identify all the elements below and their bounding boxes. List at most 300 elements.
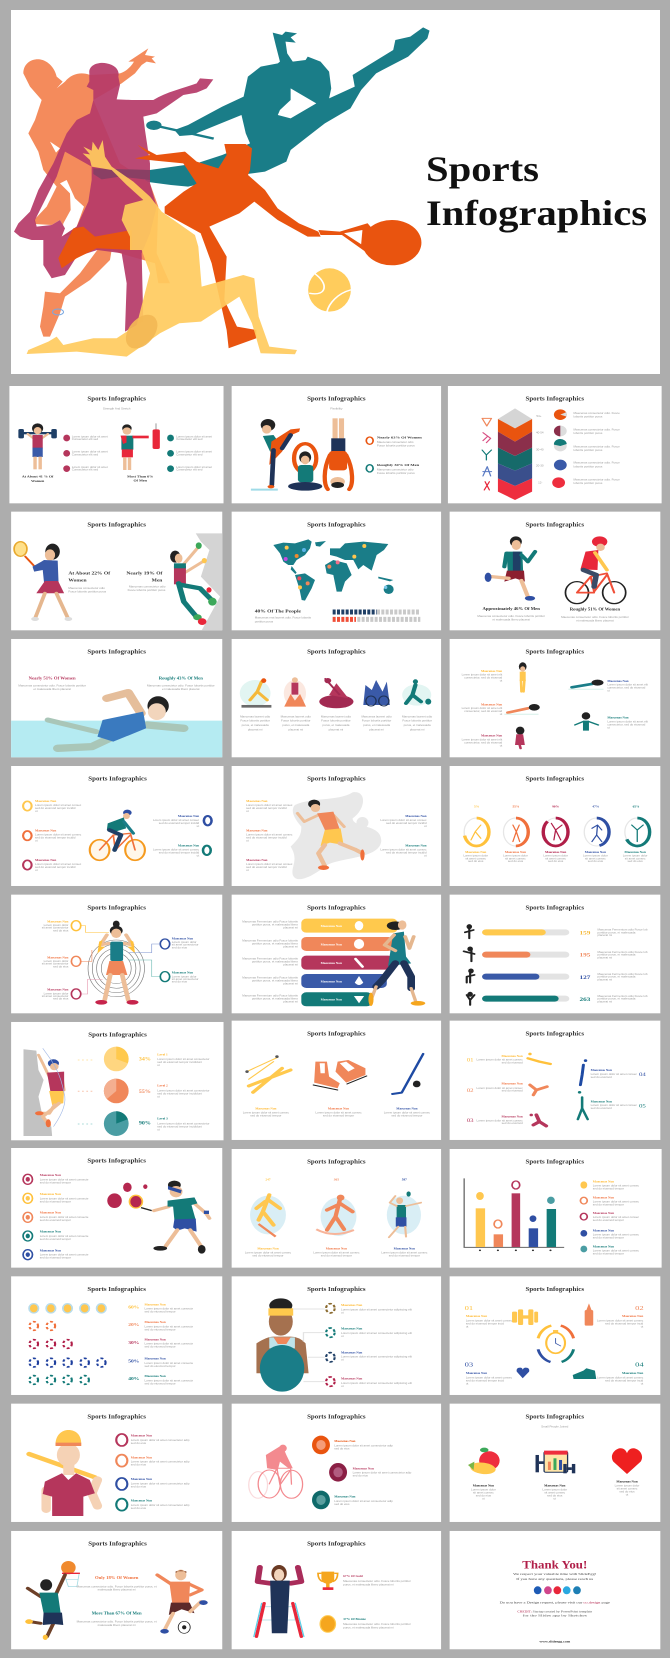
text: men stat [77, 1611, 157, 1627]
connectors [81, 926, 159, 994]
dotted leaders [78, 1060, 95, 1124]
text: ring captions: Lorem ipsum dolor [583, 854, 608, 858]
text: list blocks: Maecenas Non [144, 1303, 166, 1306]
slide title: Sports Infographics [307, 1158, 366, 1165]
text: list blocks: Lorem ipsum dolor sit amet consecte [40, 1178, 89, 1181]
panel: slide 14 stacked ribbons with jogger [232, 895, 441, 1013]
text: three captions: Lorem ipsum dolor sit amet consec [243, 1111, 290, 1115]
slide title: Sports Infographics [88, 1540, 147, 1547]
text: blocks: Maecenas Non [466, 1314, 487, 1318]
numbers: 02 [467, 1088, 474, 1094]
stat: women: Maecenas consectetur odio. Fusce lobortis porttitor [18, 684, 86, 687]
icons: bar tops [476, 1181, 555, 1228]
text: list blocks: Lorem ipsum dolor sit amet consectetur adip [334, 1444, 393, 1447]
text: right blocks: sed do eiusmod tempor incidid [159, 851, 200, 855]
text: legend blocks: Maecenas Non [593, 1196, 614, 1199]
panel: slide 18 numbered sports [450, 1021, 660, 1140]
text: right blocks: ut [197, 824, 199, 828]
text: left blocks: sit amet consectetur [42, 962, 68, 966]
text: right blocks: Maecenas Non [607, 679, 629, 683]
slide title: Sports Infographics [525, 775, 584, 782]
text: gold stat: 67% Of Gold [343, 1574, 363, 1578]
text: captions: Maecenas Non [326, 1247, 347, 1250]
labels: ring percentages: 5% [474, 805, 479, 809]
text: list blocks [144, 1303, 194, 1385]
text: left blocks [462, 669, 503, 747]
text: left blocks: Maecenas Non [481, 703, 503, 706]
text: levels: ut [157, 1063, 160, 1067]
panel: slide 23 athlete with ball [232, 1276, 441, 1395]
text: left blocks: consectetur, sed do eiusmod [464, 709, 503, 713]
text: website: www.slideegg.com [539, 1640, 570, 1643]
text: five captions: purus, et malesuada [322, 723, 350, 727]
text: right blocks: sed do eiusmod [591, 1106, 612, 1110]
title [426, 149, 647, 233]
text: bar descriptions: porttitor purus, et malesuada [598, 975, 636, 979]
text: right blocks: consectetur, sed do eiusmod [607, 686, 646, 690]
text: list blocks: sed do eius [353, 1474, 369, 1478]
text: left blocks: ut [500, 679, 502, 683]
stat: men: Men [152, 579, 163, 583]
numbers: 01 [465, 1304, 473, 1312]
text: percentages [139, 1057, 151, 1126]
slide title: Sports Infographics [525, 395, 584, 402]
text: list blocks: Lorem ipsum dolor sit amet consectetur adipiscing elit [341, 1355, 412, 1359]
icons: three discs [312, 1436, 347, 1509]
panel: slide 17 winter equipment [232, 1021, 441, 1140]
text: left blocks: Lorem ipsum dolor sit amet consec [35, 833, 82, 837]
text: left blocks: sed do eiusmod [502, 1121, 523, 1125]
text: left blocks: ut [246, 868, 249, 872]
text: three captions: sed do eiusmod tempor [250, 1114, 282, 1118]
text: ring captions: sit amet consec [585, 857, 606, 860]
text: left blocks: Lorem ipsum dolor sit amet consec [246, 833, 293, 837]
text: levels: ut [157, 1128, 160, 1131]
panel: slide 6 runner and cyclist [450, 512, 660, 630]
text: list blocks: Lorem ipsum dolor sit amet consectetur adipiscing elit [341, 1381, 412, 1385]
stat: men [147, 676, 215, 691]
text: right blocks: sit amet consectetur [172, 977, 199, 981]
panel: slide 25 baseball player [11, 1404, 222, 1522]
stat: men [366, 463, 420, 475]
text: list blocks: Lorem ipsum dolor sit amet consecte [144, 1325, 194, 1328]
text: left blocks: sit amet consectetur [42, 994, 68, 998]
text: left descriptions [242, 920, 299, 1004]
text: list blocks: Maecenas Non [341, 1303, 363, 1307]
text: three captions: sed do eiusmod tempor [391, 1114, 423, 1118]
panel: slide 21 bar chart [450, 1149, 662, 1268]
text: left blocks: sed do eiusmod tempor incidid [35, 836, 76, 840]
text: ring captions: sit amet consec [545, 857, 567, 860]
text: five captions: Fusce lobortis porttitor [362, 719, 391, 723]
text: five captions: Maecenas laoreet odio [281, 715, 311, 718]
chart: three pies [104, 1047, 129, 1136]
text: ring captions: Maecenas Non [465, 850, 487, 854]
text: bronze stat: 37% Of Bronze [343, 1617, 367, 1621]
stat label men: Most Than 6% [127, 475, 154, 479]
slide title: Sports Infographics [87, 1285, 146, 1293]
text: pie descriptions: Maecenas consectetur odio. Fusce [574, 461, 620, 465]
stat: women [366, 435, 423, 448]
text: left blocks: Maecenas Non [246, 799, 268, 803]
panel: slide 9 exercise poses [450, 639, 660, 757]
illustration: athlete holding teal ball [256, 1298, 309, 1392]
text: percentages: 40% [128, 1377, 139, 1382]
text: pie descriptions: lobortis porttitor purus [574, 481, 603, 485]
labels: age ranges [536, 414, 544, 485]
text: captions: Maecenas Non [473, 1484, 494, 1487]
text: left blocks: Lorem ipsum dolor sit amet elit [462, 673, 502, 677]
text: list blocks: ut [341, 1311, 344, 1314]
text: left blocks: Lorem ipsum dolor sit amet consec [35, 862, 82, 866]
numbers: 02 [635, 1304, 644, 1312]
text: list blocks [40, 1173, 89, 1260]
text: three captions: Maecenas Non [328, 1107, 349, 1111]
text: right blocks [591, 1068, 638, 1110]
illustration: teal woman [575, 712, 598, 731]
stat: men: Fusce lobortis porttitor purus [128, 588, 166, 592]
text: left descriptions: Maecenas Fermentum odio Fusce lobortis [242, 976, 299, 979]
icons: ball rings [326, 1304, 335, 1386]
text: captions: sed do eius [547, 1494, 563, 1497]
text: ring captions: sed do eius [468, 859, 484, 863]
text: pie descriptions: lobortis porttitor purus [574, 448, 603, 452]
text: bar descriptions: placerat mi [598, 978, 613, 981]
text: blocks: sed do eiusmod tempor incid [605, 1322, 644, 1326]
text: pie descriptions: Maecenas consectetur odio. Fusce [574, 428, 620, 431]
list: crimson bullets: Consectetur elit sed [72, 468, 99, 472]
stat: women: Maecenas consectetur odio [377, 440, 414, 444]
text: right blocks: Maecenas Non [591, 1100, 612, 1104]
stat: men: Maecenas consectetur odio [129, 585, 166, 588]
panel: slide 12 five progress rings [450, 766, 660, 886]
text: ring captions: Lorem ipsum dolor [503, 854, 528, 858]
text: list blocks: Lorem ipsum dolor sit amet consecte [144, 1361, 194, 1365]
text: legend blocks: Maecenas Non [593, 1211, 614, 1215]
chart: progress rings [464, 818, 650, 846]
text: bar descriptions: Maecenas Fermentum odio Fusce lob [598, 950, 648, 954]
text: right blocks: Maecenas Non [405, 814, 427, 818]
icon: trophy [318, 1572, 338, 1590]
text: blocks: Maecenas Non [466, 1371, 487, 1375]
stat: women: Nearly 63% Of Women [377, 435, 423, 440]
stat: women: At About 22% Of [68, 572, 110, 576]
text: three captions: Lorem ipsum dolor sit amet consec [315, 1111, 362, 1115]
title: Infographics [426, 193, 647, 233]
text: blocks: Maecenas Non [622, 1371, 644, 1375]
text: list blocks: ut [341, 1334, 344, 1338]
text: ring captions: sed do eius [627, 859, 643, 863]
text: pie descriptions: Maecenas consectetur odio. Fusce [574, 411, 620, 415]
panel: slide 27 food and training [450, 1404, 660, 1522]
text: runner stat [477, 606, 545, 621]
text: blocks: ut [466, 1325, 469, 1328]
slide title: Sports Infographics [307, 775, 366, 782]
text: ring captions: Lorem ipsum dolor [623, 854, 648, 858]
text: left blocks: Lorem ipsum dolor sit amet consec [246, 862, 293, 866]
list: teal bullets: Lorem ipsum dolor sit amet [176, 465, 212, 469]
panel: slide 11 runner over blob [232, 766, 441, 886]
stat: men: Maecenas consectetur odio. Fusce lobortis porttitor [147, 684, 215, 687]
illustration: volleyball player [387, 1191, 421, 1237]
text: percentages: 50% [128, 1360, 139, 1364]
text: left blocks: Lorem ipsum dolor sit amet elit [462, 706, 502, 710]
text: right blocks: Maecenas Non [607, 716, 629, 720]
text: three captions [243, 1107, 431, 1118]
slide title: Sports Infographics [307, 395, 366, 402]
illustration: fitness woman [95, 921, 138, 1005]
text: left blocks: Maecenas Non [501, 1115, 523, 1118]
small selection ring [52, 309, 64, 315]
icons: social row [534, 1586, 581, 1594]
text: left descriptions: placerat mi [283, 1000, 298, 1004]
text: left blocks: Maecenas Non [481, 669, 503, 673]
text: captions: Maecenas Non [616, 1480, 638, 1483]
text: left blocks: sed do eiusmod [502, 1061, 523, 1064]
text: left blocks: sed do eiusmod tempor incidid [35, 806, 76, 810]
text: bronze stat: Maecenas consectetur odio. Fusce lobortis porttitor [343, 1622, 411, 1626]
slide title: Sports Infographics [307, 903, 366, 911]
text: left blocks: Lorem ipsum dolor sit amet elit [462, 738, 502, 741]
text: levels: Lorem ipsum dolor sit amet consectetur [157, 1089, 210, 1092]
numbers: 127 [580, 975, 591, 981]
text: left blocks [35, 799, 82, 872]
text: right blocks: Lorem ipsum dolor sit amet consec [591, 1103, 638, 1107]
text: right blocks: Maecenas Non [178, 844, 200, 848]
text: captions: sed do eiusmod tempor [389, 1254, 420, 1258]
text: captions: sit amet consec [617, 1487, 638, 1490]
text: list blocks: Lorem ipsum dolor sit amet consectetur adip [131, 1503, 190, 1507]
text: right blocks: Lorem ipsum dolor sit amet consec [380, 848, 427, 852]
text: five captions: placerat mi [329, 728, 344, 732]
panel: slide 20 board sports [232, 1149, 441, 1268]
text: women stat: malesuada libero placerat mi [98, 1588, 136, 1591]
text: left descriptions: Maecenas Fermentum odio Fusce lobortis [242, 920, 299, 924]
text: five captions: placerat mi [369, 728, 384, 732]
pictogram: teal row [29, 1376, 89, 1384]
text: levels [157, 1053, 210, 1131]
text: three captions: Maecenas Non [255, 1107, 277, 1111]
panel: slide 28 basketball and soccer [11, 1531, 222, 1649]
illustration: cyclist [565, 536, 626, 604]
illustration: tennis woman [14, 542, 72, 621]
title: Sports [426, 149, 539, 189]
background blob [291, 792, 381, 879]
text: legend blocks: Maecenas Non [593, 1245, 614, 1248]
stat: women: Nearly 51% Of Women [29, 676, 76, 680]
text: list blocks: sed do eiusmod tempor [144, 1364, 176, 1368]
text: left blocks: Lorem ipsum dolor sit amet consec [476, 1058, 523, 1062]
panel: slide 2 flexibility [232, 386, 441, 503]
icon: coin [320, 1616, 336, 1632]
text: women stat: Only 18% Of Women [95, 1575, 139, 1580]
text: left blocks: Lorem ipsum dolor sit amet consec [35, 803, 82, 807]
text: runner stat: et malesuada libero placerat [492, 618, 530, 621]
text: three captions: Maecenas Non [396, 1107, 418, 1111]
text: left blocks: ut [35, 868, 38, 872]
text: left blocks: Maecenas Non [47, 920, 69, 923]
text: cyclist stat: Roughly 51% Of Women [570, 607, 621, 612]
text: left blocks [42, 920, 69, 1001]
text: five captions: purus, et malesuada [404, 723, 431, 727]
text: left blocks: sed do eiusmod tempor incidid [35, 865, 76, 869]
text: legend blocks [593, 1180, 640, 1255]
illustration: yellow stretching figure silhouette [27, 140, 297, 357]
text: blocks: sed do eiusmod tempor incid [466, 1379, 505, 1383]
text: list blocks: Maecenas Non [40, 1230, 61, 1234]
text: left blocks: Lorem ipsum dolor sit amet consec [476, 1086, 523, 1090]
illustration: weightlifter woman [18, 423, 57, 469]
text: left blocks: Lorem ipsum dolor sit amet consec [246, 803, 293, 807]
charts: five small pies [552, 409, 567, 488]
text: bar descriptions: porttitor purus, et malesuada [598, 931, 636, 934]
text: percentages: 20% [128, 1323, 139, 1328]
illustration: jogger woman [368, 920, 425, 1006]
text: list blocks: Lorem ipsum dolor sit amet consecte [40, 1197, 89, 1200]
list: teal bullets: Consectetur elit sed [176, 453, 203, 456]
list: teal bullets: Lorem ipsum dolor sit amet [176, 450, 212, 454]
text: blocks: ut [641, 1325, 644, 1328]
text: left blocks: ut [246, 839, 249, 843]
text: pie descriptions: lobortis porttitor purus [574, 431, 603, 435]
text: list blocks: Maecenas Non [144, 1320, 166, 1324]
text: captions: sed do eius [619, 1490, 635, 1493]
text: cyclist stat: et malesuada libero placerat [576, 619, 614, 622]
text: bar descriptions: Maecenas Fermentum odio Fusce lob [598, 994, 648, 998]
text: captions: Lorem ipsum dolor sit amet consec [381, 1251, 428, 1255]
text: list blocks: Lorem ipsum dolor sit amet consecte [40, 1215, 89, 1219]
list: teal bullets: Consectetur elit sed [176, 437, 203, 441]
text: right blocks: sit amet consectetur [172, 943, 199, 947]
icons: black athlete silhouettes [464, 925, 474, 1005]
stat: women [68, 572, 110, 594]
text: left blocks: Lorem ipsum dolor sit amet consec [476, 1119, 523, 1122]
icons: sport silhouettes [528, 1053, 588, 1126]
text: captions: ut [554, 1497, 556, 1500]
chart: horizontal progress bars [482, 929, 569, 1002]
panel: slide 1 strength and stretch [9, 386, 224, 503]
illustration: crimson squat [515, 727, 525, 748]
icons: athletes within rings [471, 823, 643, 842]
text: captions: ut [482, 1497, 485, 1500]
text: left blocks: sed do eiusmod tempor incidid [246, 806, 287, 810]
text: ring captions: sit amet consec [625, 857, 646, 860]
illustration: climber on rock wall [170, 533, 222, 630]
text: bar descriptions: porttitor purus, et malesuada [598, 997, 636, 1001]
text: left descriptions: porttitor purus, et malesuada libero [252, 923, 298, 927]
text: list blocks: Maecenas Non [144, 1357, 166, 1361]
numbers: 01 [467, 1058, 474, 1063]
subtitle: Flexibility [330, 407, 343, 411]
list: crimson bullets: Consectetur elit sed [72, 453, 99, 456]
text: list blocks: ut [341, 1384, 344, 1388]
text: levels: ut [157, 1095, 160, 1098]
text: left blocks: sed do eiusmod tempor incidid [246, 865, 287, 869]
text: list blocks: Maecenas Non [131, 1434, 152, 1438]
slide title: Sports Infographics [87, 1412, 146, 1420]
text: legend blocks: sed do eiusmod tempor [593, 1203, 624, 1206]
stat label men [127, 475, 154, 483]
list: crimson bullets: Lorem ipsum dolor sit amet [72, 465, 108, 469]
text: credit [517, 1610, 593, 1617]
text: list blocks: sed do eiusmod tempor [40, 1237, 71, 1241]
stat: men: Nearly 19% Of [126, 572, 163, 576]
illustration: orange plank [504, 704, 540, 714]
illustration: skateboarder [250, 1195, 286, 1237]
icons: five sport scenes [240, 677, 431, 708]
map pins [284, 544, 387, 589]
text: ring captions: Lorem ipsum dolor [463, 854, 488, 858]
text: right blocks: consectetur, sed do eiusmod [607, 723, 646, 726]
text: list blocks: Maecenas Non [40, 1249, 61, 1252]
text: credit: for the Slides app by Sketches [523, 1614, 588, 1617]
text: left descriptions: Maecenas Fermentum odio Fusce lobortis [242, 994, 299, 998]
text: left descriptions: placerat mi [283, 945, 298, 948]
labels: age ranges: 30-40 [536, 448, 544, 451]
text: left descriptions: porttitor purus, et malesuada libero [252, 979, 298, 982]
text: list blocks: Maecenas Non [131, 1499, 152, 1503]
text: left blocks: Maecenas Non [501, 1054, 523, 1058]
text: list blocks: Maecenas Non [40, 1173, 61, 1177]
text: list blocks: sed do eius [131, 1463, 147, 1467]
illustration: standing yellow figure [519, 662, 527, 692]
illustration: soccer kid [157, 1570, 208, 1634]
icon: tennis ball [308, 268, 351, 312]
text: left blocks: ut [500, 744, 502, 747]
illustration: swimmer [48, 693, 184, 748]
text: left descriptions: placerat mi [283, 926, 298, 930]
text: captions: Maecenas Non [394, 1247, 415, 1250]
panel: slide 30 thank you [450, 1531, 660, 1649]
stat label women [22, 475, 54, 483]
text: percentages [128, 1306, 139, 1382]
panel: slide 24 stopwatch cycle [450, 1276, 660, 1395]
text: captions: sed do eius [476, 1494, 492, 1497]
text: left blocks: ut [246, 809, 249, 813]
text: left blocks: sed do eius [53, 997, 69, 1001]
numbers: 195 [580, 952, 591, 958]
text: list blocks [334, 1439, 412, 1506]
text: right blocks: Maecenas Non [172, 937, 193, 940]
stat: share of people: porttitor purus [255, 620, 274, 623]
text: legend blocks: sed do eiusmod tempor [593, 1236, 624, 1239]
text: right blocks [380, 814, 427, 858]
text: captions: ut [626, 1493, 629, 1496]
list: crimson bullets: Lorem ipsum dolor sit amet [72, 435, 108, 438]
text: list blocks: Lorem ipsum dolor sit amet consectetur adip [131, 1482, 190, 1485]
text: bar descriptions: placerat mi [598, 956, 613, 959]
text: men stat: More Than 67% Of Men [92, 1611, 142, 1615]
text: men stat: Maecenas consectetur odio. Fusce lobortis porttitor purus, et [77, 1620, 157, 1623]
text: list blocks: Lorem ipsum dolor sit amet consecte [40, 1253, 89, 1257]
text: left blocks: Lorem ipsum dolor [44, 992, 68, 995]
text: right blocks: sed do eiusmod tempor incidid [159, 821, 200, 825]
text: legend blocks: sed do eiusmod tempor [593, 1252, 624, 1255]
text: list blocks: sed do eiusmod tempor [40, 1256, 71, 1260]
text: bar descriptions: Maecenas Fermentum odio Fusce lob [598, 928, 648, 932]
text: blocks: sed do eiusmod tempor incid [466, 1322, 505, 1326]
text: levels: sed do eiusmod tempor incididunt [157, 1060, 202, 1064]
text: pie descriptions: Maecenas consectetur odio. Fusce [574, 478, 620, 481]
ribbon labels: Maecenas Non [321, 924, 342, 928]
text: right blocks: sed do eiusmod tempor incidid [386, 821, 427, 825]
text: captions: Lorem ipsum dolor [615, 1484, 639, 1487]
pictogram: blue row [29, 1358, 106, 1367]
text: list blocks: Lorem ipsum dolor sit amet consecte [144, 1379, 194, 1382]
slide title: Sports Infographics [525, 1412, 584, 1420]
text: list blocks: Maecenas Non [341, 1351, 363, 1354]
text: right blocks: sed do eiusmod tempor incidid [386, 851, 427, 855]
